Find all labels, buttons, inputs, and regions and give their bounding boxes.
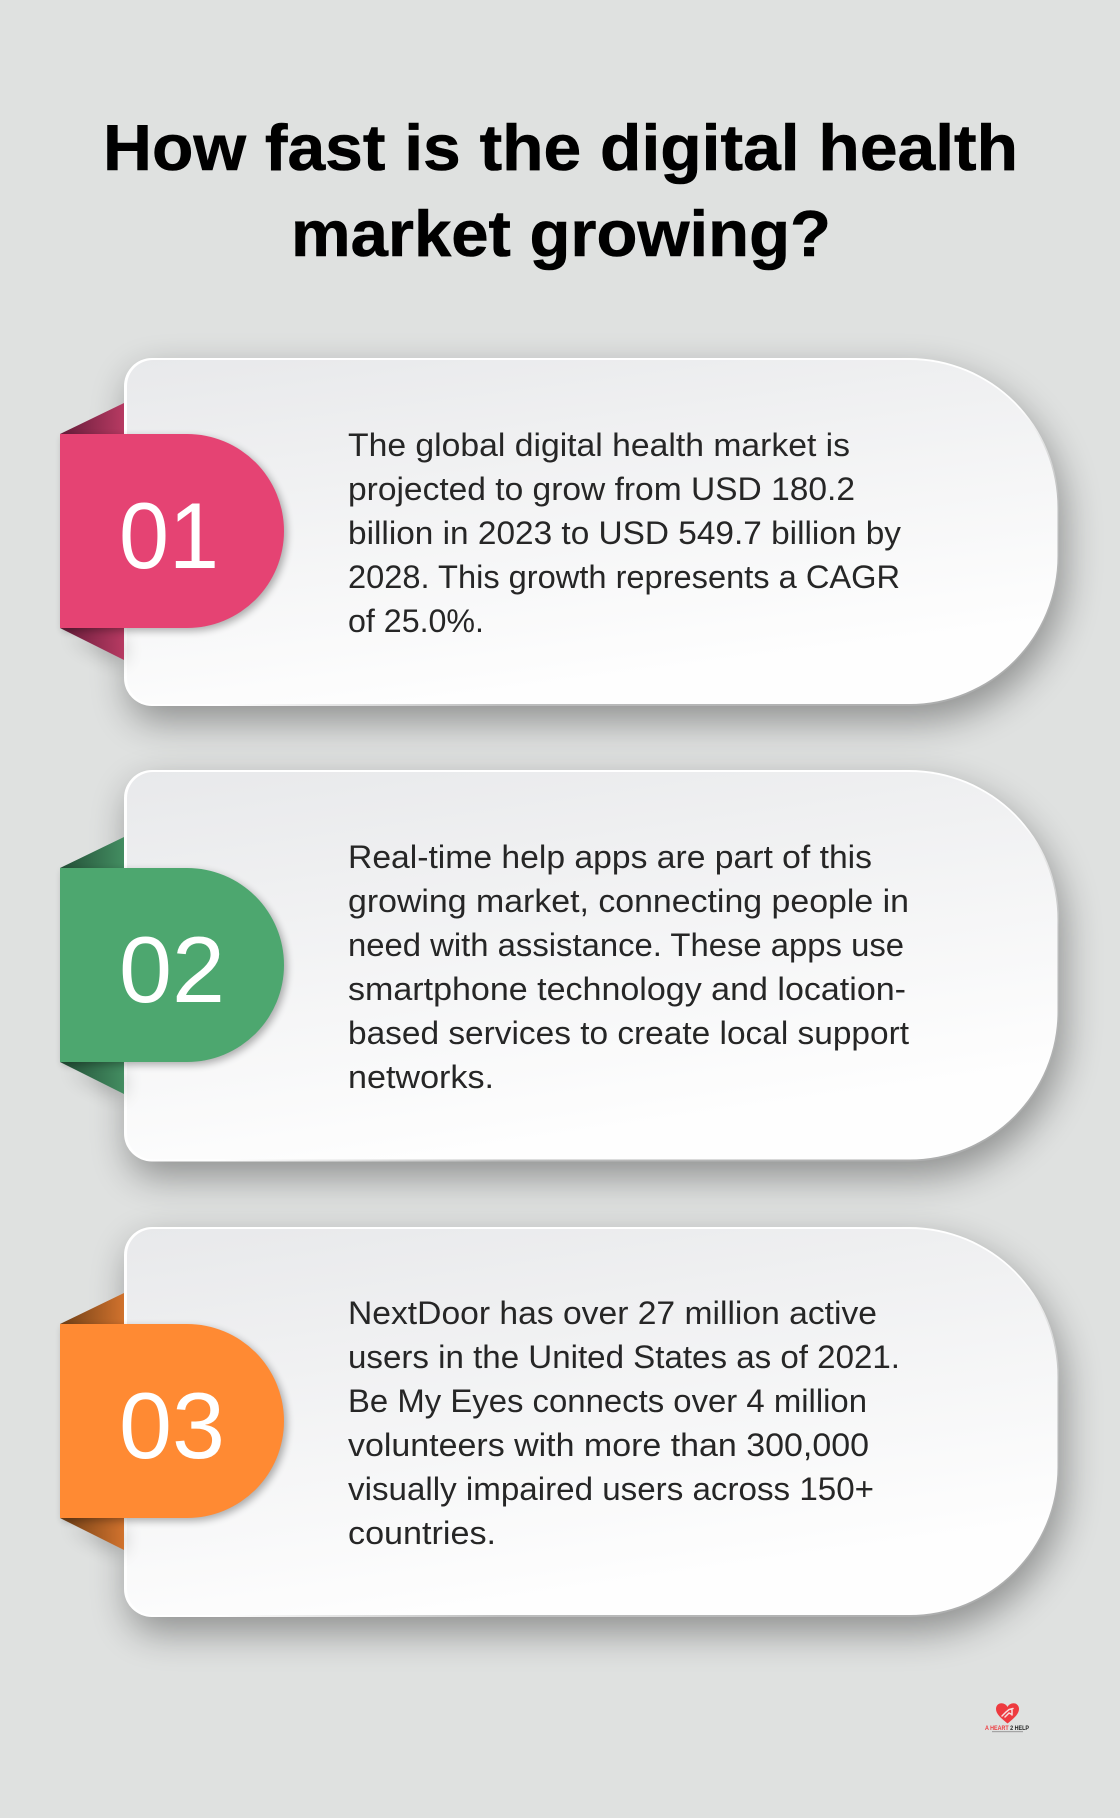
text: market projection: The global digital health market is	[348, 427, 850, 463]
text: market projection: billion in 2023 to USD 549.7 billion by	[348, 515, 901, 551]
card 03 shadow	[129, 1242, 1064, 1632]
text: market projection: 2028. This growth represents a CAGR	[348, 559, 900, 595]
badge 01	[60, 434, 284, 628]
panel: card 02	[60, 770, 1064, 1176]
badge 02 top fold	[60, 837, 124, 868]
logo tagline rule	[992, 1731, 1023, 1732]
icon: helping hands	[1002, 1708, 1013, 1717]
text: NextDoor and Be My Eyes: users in the United States as of 2021.	[348, 1339, 900, 1375]
panel: card 03	[60, 1227, 1064, 1632]
badge 03 shadow	[63, 1327, 287, 1521]
card 03 edge	[124, 1227, 1059, 1617]
badge 03 bottom fold	[60, 1518, 124, 1550]
title	[103, 111, 1018, 270]
text: NextDoor and Be My Eyes: visually impaired users across 150+	[348, 1471, 874, 1507]
text: market projection: projected to grow from USD 180.2	[348, 471, 855, 507]
card 01 surface	[127, 360, 1058, 704]
text: market projection	[348, 427, 901, 639]
card 02 shadow	[129, 785, 1064, 1176]
card 02 edge	[124, 770, 1059, 1162]
badge 01 shadow	[63, 437, 287, 631]
text: NextDoor and Be My Eyes: NextDoor has over 27 million active	[348, 1295, 877, 1331]
panel: card 01	[60, 358, 1064, 721]
text: real-time help apps	[348, 839, 909, 1095]
badge 02 shadow	[63, 871, 287, 1065]
logo wordmark: A HEART 2 HELP	[985, 1725, 1029, 1732]
title: market growing?	[291, 197, 831, 270]
badge 01 bottom fold	[60, 628, 124, 660]
text: real-time help apps: networks.	[348, 1059, 494, 1095]
card 01 edge	[124, 358, 1059, 706]
text: NextDoor and Be My Eyes: countries.	[348, 1515, 496, 1551]
text: market projection: of 25.0%.	[348, 603, 484, 639]
text: real-time help apps: based services to create local support	[348, 1015, 909, 1051]
card 02 surface	[127, 772, 1058, 1160]
text: NextDoor and Be My Eyes: Be My Eyes connects over 4 million	[348, 1383, 867, 1419]
text: real-time help apps: smartphone technology and location-	[348, 971, 906, 1007]
card 03 surface	[127, 1229, 1058, 1615]
badge 02 bottom fold	[60, 1062, 124, 1094]
badge 02 fold shadow	[70, 1070, 122, 1096]
badge 03 fold shadow	[70, 1526, 122, 1552]
text: real-time help apps: Real-time help apps are part of this	[348, 839, 872, 875]
badge 02	[60, 868, 284, 1062]
badge 03 top fold	[60, 1293, 124, 1324]
text: real-time help apps: growing market, connecting people in	[348, 883, 909, 919]
badge 01 fold shadow	[70, 636, 122, 662]
number 02: 02	[119, 917, 225, 1022]
card 01 shadow	[129, 373, 1064, 721]
text: NextDoor and Be My Eyes: volunteers with more than 300,000	[348, 1427, 869, 1463]
badge 01 top fold	[60, 403, 124, 434]
number 01: 01	[119, 483, 219, 588]
badge 03	[60, 1324, 284, 1518]
text: real-time help apps: need with assistance. These apps use	[348, 927, 904, 963]
text: NextDoor and Be My Eyes	[348, 1295, 900, 1551]
logo: A Heart 2 Help	[985, 1703, 1029, 1732]
title: How fast is the digital health	[103, 111, 1018, 184]
icon: heart	[996, 1703, 1019, 1724]
number 03: 03	[119, 1373, 225, 1478]
